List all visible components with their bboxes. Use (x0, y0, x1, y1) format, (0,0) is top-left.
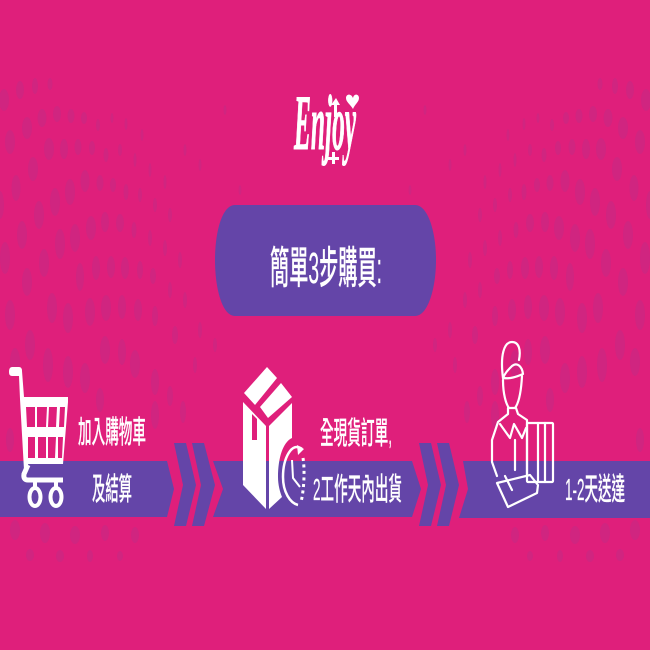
icon: heart (346, 95, 359, 109)
step 2: box: 全現貨訂單, (320, 416, 392, 451)
step 1: cart (9, 367, 146, 507)
logo: Enjoy (294, 79, 359, 166)
text: 加入購物車 (78, 415, 146, 450)
icon: parcel box with clock (243, 367, 304, 509)
icon: arrow on o (328, 98, 340, 164)
icon: delivery man with parcel (492, 342, 553, 507)
step band 1 (0, 461, 174, 517)
icon: shopping cart (9, 367, 68, 506)
heading pill: 簡單3步購買: (270, 244, 382, 293)
heading pill (215, 205, 436, 316)
step 1: cart: 及結算 (92, 472, 132, 507)
text: 2工作天內出貨 (313, 472, 402, 507)
chevrons 2 (419, 443, 459, 526)
step band 3 (459, 461, 650, 518)
step 3: delivery (492, 342, 625, 507)
text: Enjoy (294, 79, 356, 166)
step band 2 (213, 461, 421, 517)
chevrons 1 (174, 443, 215, 526)
step 2: box (243, 367, 402, 509)
